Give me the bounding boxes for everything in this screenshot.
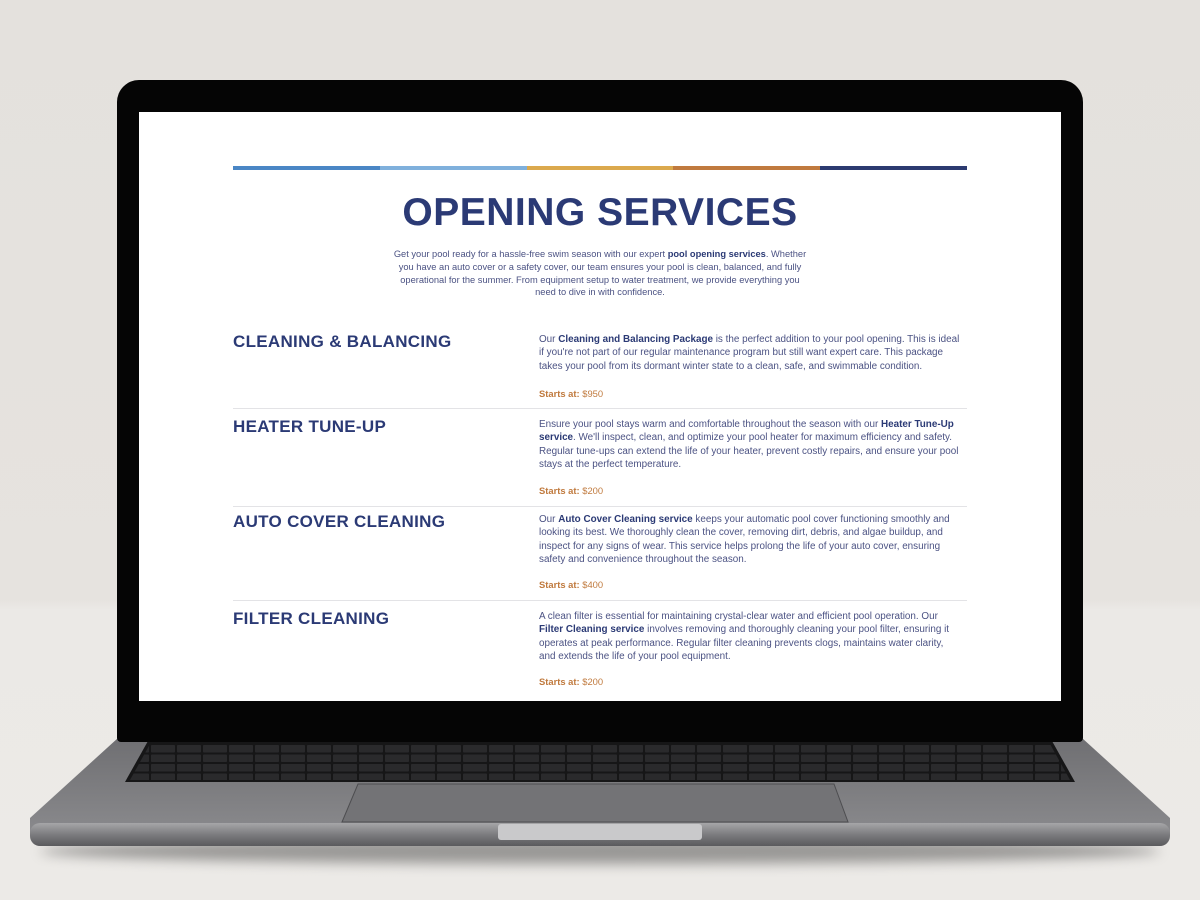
description bbox=[539, 419, 958, 470]
laptop shadow bbox=[40, 838, 1160, 864]
top color bar bbox=[233, 166, 967, 170]
heading: AUTO COVER CLEANING bbox=[233, 512, 445, 531]
intro text: operational for the summer. From equipment setup to water treatment, we provide everything you bbox=[400, 275, 800, 285]
description bbox=[539, 514, 950, 565]
intro text bbox=[394, 249, 806, 297]
description: service. We'll inspect, clean, and optimize your pool heater for maximum efficiency and safety. bbox=[539, 432, 952, 443]
laptop lid bbox=[117, 80, 1083, 742]
section: filter cleaning bbox=[233, 609, 949, 687]
description bbox=[539, 334, 959, 372]
section: heater tune-up bbox=[233, 417, 958, 496]
heading: FILTER CLEANING bbox=[233, 609, 389, 628]
section: auto cover cleaning bbox=[233, 512, 950, 590]
description: Ensure your pool stays warm and comfortable throughout the season with our Heater Tune-Up bbox=[539, 419, 954, 430]
title: OPENING SERVICES bbox=[402, 191, 798, 234]
intro text: Get your pool ready for a hassle-free swim season with our expert pool opening services. Whether bbox=[394, 249, 806, 259]
description: operates at peak performance. Regular filter cleaning prevents clogs, maintains water clarity, bbox=[539, 638, 943, 649]
description: Our Auto Cover Cleaning service keeps your automatic pool cover functioning smoothly and bbox=[539, 514, 950, 525]
section: cleaning & balancing bbox=[233, 332, 959, 399]
description: Regular tune-ups can extend the life of your heater, prevent costly repairs, and ensure your pool bbox=[539, 446, 958, 457]
description: takes your pool from its dormant winter state to a clean, safe, and swimmable condition. bbox=[539, 361, 922, 372]
description bbox=[539, 611, 949, 662]
heading: HEATER TUNE-UP bbox=[233, 417, 386, 436]
description: safety and convenience throughout the season. bbox=[539, 554, 747, 565]
description: looking its best. We thoroughly clean the cover, removing dirt, debris, and algae buildup, and bbox=[539, 527, 943, 538]
price: Starts at: $200 bbox=[539, 485, 603, 496]
description: if you're not part of our regular maintenance program but still want expert care. This package bbox=[539, 347, 943, 358]
description: inspect for any signs of wear. This service helps prolong the life of your auto cover, ensuring bbox=[539, 541, 940, 552]
description: Our Cleaning and Balancing Package is the perfect addition to your pool opening. This is ideal bbox=[539, 334, 959, 345]
price: Starts at: $950 bbox=[539, 388, 603, 399]
price: Starts at: $200 bbox=[539, 676, 603, 687]
description: A clean filter is essential for maintaining crystal-clear water and efficient pool operation. Our bbox=[539, 611, 938, 622]
description: and extends the life of your pool equipment. bbox=[539, 651, 731, 662]
description: Filter Cleaning service involves removing and thoroughly cleaning your pool filter, ensuring it bbox=[539, 624, 949, 635]
heading: CLEANING & BALANCING bbox=[233, 332, 452, 351]
screen bbox=[139, 112, 1061, 701]
intro text: need to dive in with confidence. bbox=[535, 287, 665, 297]
description: stays at the perfect temperature. bbox=[539, 459, 681, 470]
intro text: you have an auto cover or a safety cover, our team ensures your pool is clean, balanced, and fully bbox=[399, 262, 801, 272]
price: Starts at: $400 bbox=[539, 579, 603, 590]
